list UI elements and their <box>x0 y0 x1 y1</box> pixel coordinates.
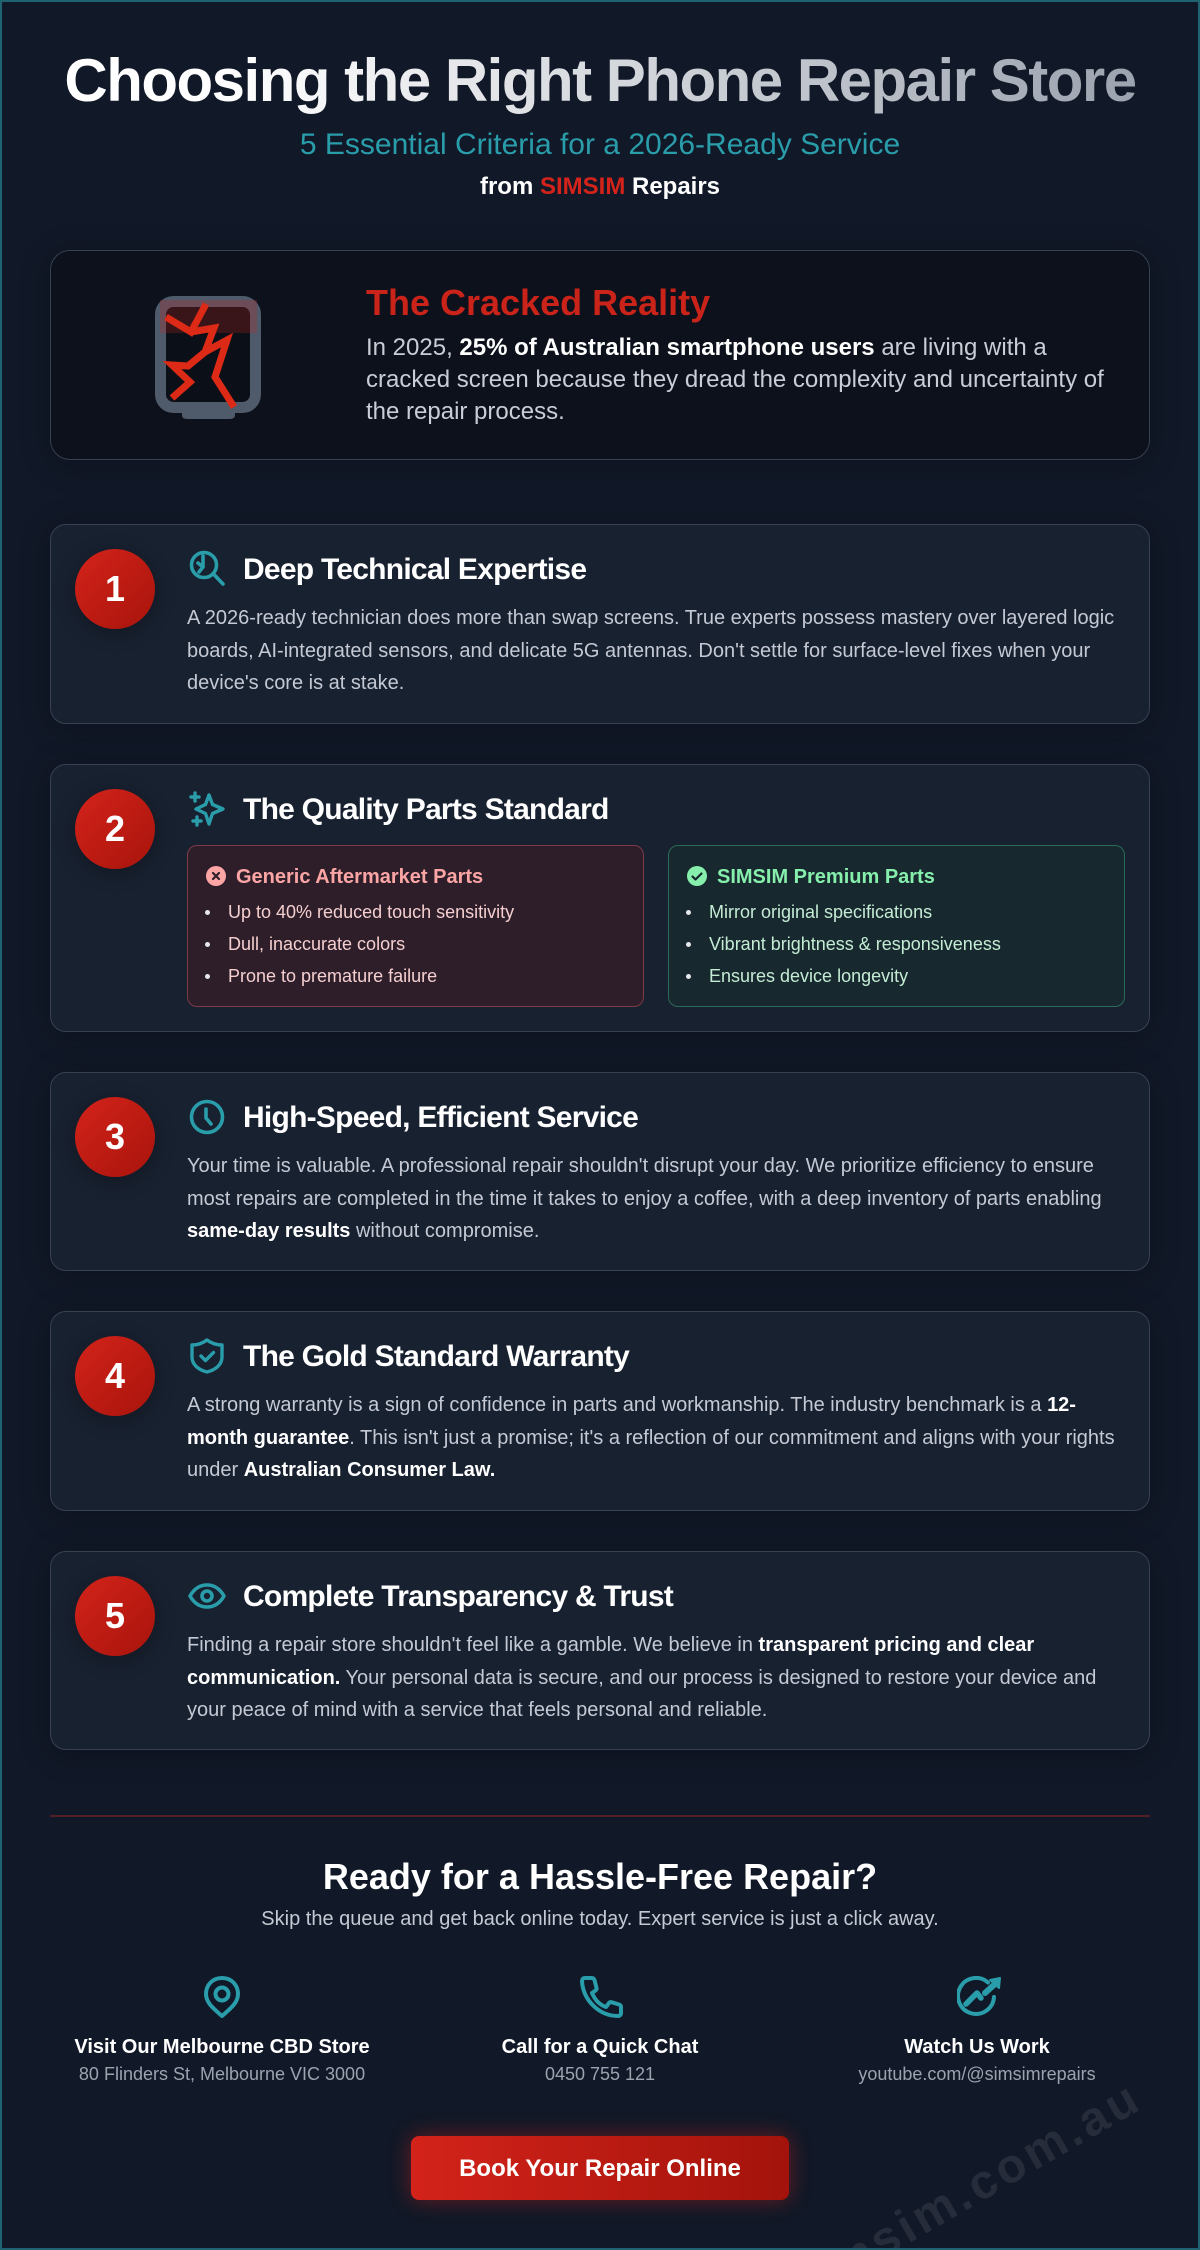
hero heading: The Cracked Reality <box>366 282 710 323</box>
list <box>686 902 1001 986</box>
list: Mirror original specifications <box>709 902 932 922</box>
description: your peace of mind with a service that feels personal and reliable. <box>187 1699 767 1721</box>
list: Prone to premature failure <box>228 966 437 986</box>
description: Your time is valuable. A professional repair shouldn't disrupt your day. We prioritize efficiency to ensure <box>187 1155 1094 1177</box>
list: Ensures device longevity <box>709 966 908 986</box>
number badge 4 <box>75 1336 155 1416</box>
list: Up to 40% reduced touch sensitivity <box>228 902 514 922</box>
address: 80 Flinders St, Melbourne VIC 3000 <box>79 2064 365 2084</box>
description: under Australian Consumer Law. <box>187 1459 495 1481</box>
list: Vibrant brightness & responsiveness <box>709 934 1001 954</box>
number badge 1: 1 <box>105 568 125 609</box>
description: Finding a repair store shouldn't feel like a gamble. We believe in transparent pricing and clear <box>187 1634 1034 1656</box>
description <box>187 1155 1102 1242</box>
description <box>187 607 1114 694</box>
icon: eye <box>188 1583 226 1609</box>
number badge 3: 3 <box>105 1116 125 1157</box>
icon: cracked phone <box>155 296 261 419</box>
premium parts box <box>668 845 1125 1007</box>
label: Call for a Quick Chat <box>502 2036 698 2058</box>
number badge 2: 2 <box>105 808 125 849</box>
description: A strong warranty is a sign of confidence in parts and workmanship. The industry benchmark is a 12- <box>187 1394 1076 1416</box>
description: communication. Your personal data is secure, and our process is designed to restore your device and <box>187 1666 1096 1688</box>
list <box>205 902 514 986</box>
button: book online: Book Your Repair Online <box>459 2155 741 2182</box>
box heading: SIMSIM Premium Parts <box>717 866 935 888</box>
contact: phone <box>502 1976 698 2084</box>
CTA heading: Ready for a Hassle-Free Repair? <box>323 1856 877 1897</box>
description: month guarantee. This isn't just a promise; it's a reflection of our commitment and aligns with your rights <box>187 1426 1115 1448</box>
panel: the cracked reality <box>50 250 1150 460</box>
hero text: the repair process. <box>366 398 565 425</box>
number badge 5 <box>75 1576 155 1656</box>
number badge 4: 4 <box>105 1355 125 1396</box>
icon: clock <box>190 1100 224 1134</box>
button: book online <box>411 2136 789 2200</box>
title: Choosing the Right Phone Repair Store <box>64 47 1136 114</box>
CTA subheading: Skip the queue and get back online today. Expert service is just a click away. <box>261 1908 939 1930</box>
list: Dull, inaccurate colors <box>228 934 405 954</box>
hero text: cracked screen because they dread the complexity and uncertainty of <box>366 366 1104 393</box>
label: Visit Our Melbourne CBD Store <box>74 2036 370 2058</box>
description: boards, AI-integrated sensors, and delicate 5G antennas. Don't settle for surface-level fixes when your <box>187 640 1090 662</box>
icon: phone <box>580 1976 623 2018</box>
heading: Complete Transparency & Trust <box>243 1580 673 1613</box>
handle: youtube.com/@simsimrepairs <box>858 2064 1096 2084</box>
panel: criterion 2 <box>50 764 1150 1032</box>
number badge 1 <box>75 549 155 629</box>
icon: magnifier <box>190 550 225 586</box>
description <box>187 1394 1115 1481</box>
generic parts box <box>187 845 644 1007</box>
hero text <box>366 334 1104 425</box>
heading: The Quality Parts Standard <box>243 793 609 826</box>
contact: store <box>74 1976 370 2084</box>
subtitle: 5 Essential Criteria for a 2026-Ready Service <box>300 128 900 161</box>
panel: criterion 1 <box>50 524 1150 724</box>
description <box>187 1634 1096 1721</box>
icon: map pin <box>204 1976 240 2018</box>
hero text: In 2025, 25% of Australian smartphone users are living with a <box>366 334 1047 361</box>
number: 0450 755 121 <box>545 2064 655 2084</box>
icon: shield <box>190 1338 224 1374</box>
byline: from SIMSIM Repairs <box>480 173 720 200</box>
description: most repairs are completed in the time it takes to enjoy a coffee, with a deep inventory of parts enabling <box>187 1188 1102 1210</box>
description: A 2026-ready technician does more than swap screens. True experts possess mastery over layered logic <box>187 607 1114 629</box>
number badge 3 <box>75 1097 155 1177</box>
icon: sparkles <box>189 791 225 827</box>
icon: video arrow <box>957 1976 1001 2016</box>
heading: High-Speed, Efficient Service <box>243 1101 638 1134</box>
number badge 2 <box>75 789 155 869</box>
heading: The Gold Standard Warranty <box>243 1340 629 1373</box>
number badge 5: 5 <box>105 1595 125 1636</box>
heading: Deep Technical Expertise <box>243 553 586 586</box>
icon: cross <box>206 866 226 886</box>
box heading: Generic Aftermarket Parts <box>236 866 483 888</box>
contact: youtube <box>858 1976 1096 2084</box>
panel: criterion 3 <box>50 1072 1150 1271</box>
icon: check <box>687 866 707 886</box>
panel: criterion 4 <box>50 1311 1150 1511</box>
panel: criterion 5 <box>50 1551 1150 1750</box>
label: Watch Us Work <box>904 2036 1050 2058</box>
description: same-day results without compromise. <box>187 1220 539 1242</box>
description: device's core is at stake. <box>187 672 404 694</box>
